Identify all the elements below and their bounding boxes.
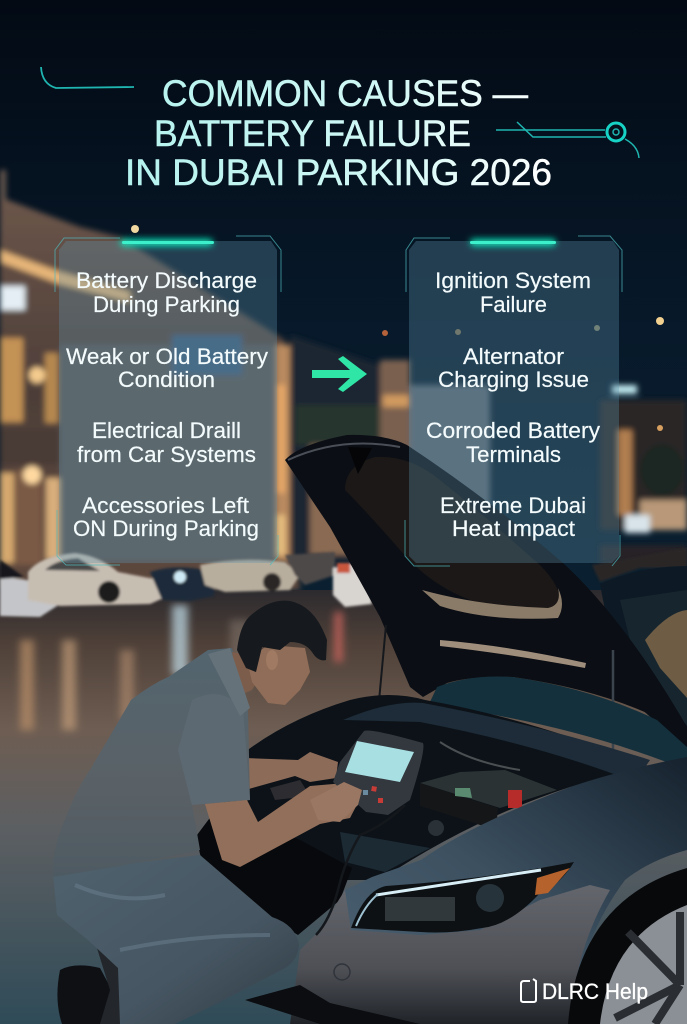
near arm [205, 783, 362, 867]
hood rim highlight [288, 444, 400, 460]
cause list right: Corroded Battery [426, 418, 600, 443]
distant bokeh lights [131, 225, 664, 431]
cause list left: from Car Systems [77, 442, 256, 467]
cause list right: Extreme Dubai [440, 493, 586, 518]
shirt [53, 648, 250, 877]
night sky background [0, 0, 687, 600]
cause list right: Failure [480, 292, 547, 317]
wet parking floor [0, 590, 687, 1024]
background parked cars [0, 548, 687, 617]
hand on scanner [310, 782, 362, 822]
mechanic [53, 601, 362, 1024]
back leg [96, 945, 175, 1024]
front grille [197, 815, 352, 935]
cause list right: Ignition System [435, 268, 591, 293]
panel: causes right [405, 236, 622, 566]
windshield base [430, 676, 687, 770]
hood hinge latch [348, 447, 372, 474]
icon: phone [521, 979, 536, 1002]
right car roof and interior behind hood [600, 566, 687, 750]
cause list right: Heat Impact [452, 516, 575, 541]
parking sensor on bumper [334, 964, 350, 980]
floor reflections [20, 605, 343, 730]
cause list left: Battery Discharge [76, 268, 257, 293]
face [247, 645, 310, 705]
blurred mall buildings [0, 170, 687, 590]
open car hood [285, 435, 687, 747]
inner hood panel [345, 457, 561, 612]
title: COMMON CAUSES — [162, 73, 528, 114]
title decoration left [41, 67, 134, 88]
bumper [290, 885, 610, 1024]
panel glow [470, 239, 556, 246]
cause list right [426, 268, 600, 541]
cause list left: Weak or Old Battery [66, 344, 268, 369]
trousers [53, 855, 299, 1024]
sleeve [178, 694, 250, 805]
cowl panel [343, 703, 650, 782]
car battery [420, 770, 557, 808]
ear [266, 650, 278, 670]
hood prop rods [378, 625, 613, 778]
title [125, 73, 552, 193]
cause list left: ON During Parking [73, 516, 259, 541]
boot [57, 965, 130, 1024]
trousers highlights [75, 885, 270, 950]
cause list right: Alternator [463, 344, 564, 369]
arrow between panels [312, 356, 367, 392]
panel glow [120, 239, 213, 246]
title: IN DUBAI PARKING 2026 [125, 152, 552, 193]
hair [237, 601, 327, 672]
far arm [245, 752, 338, 790]
front wheel [568, 868, 687, 1024]
cause list right: Charging Issue [438, 367, 589, 392]
title decoration right [496, 122, 639, 158]
cause list left: Electrical Draill [92, 418, 241, 443]
car fender and body [330, 757, 687, 1024]
tan highlight band lower [440, 640, 586, 668]
cause list left [66, 268, 268, 541]
diagnostic scanner [316, 730, 423, 935]
title: BATTERY FAILURE [154, 113, 471, 154]
panel: causes left [55, 236, 281, 565]
tan highlight band upper [422, 588, 562, 619]
lower bumper vent [245, 985, 420, 1024]
cause list right: Terminals [466, 442, 561, 467]
collar [208, 648, 250, 716]
cause list left: Accessories Left [82, 493, 249, 518]
cause list left: Condition [118, 367, 215, 392]
engine bay [205, 695, 670, 880]
logo: DLRC Help: DLRC Help [542, 979, 648, 1004]
cause list left: During Parking [93, 292, 240, 317]
headlight [351, 862, 574, 932]
neck [232, 652, 270, 695]
